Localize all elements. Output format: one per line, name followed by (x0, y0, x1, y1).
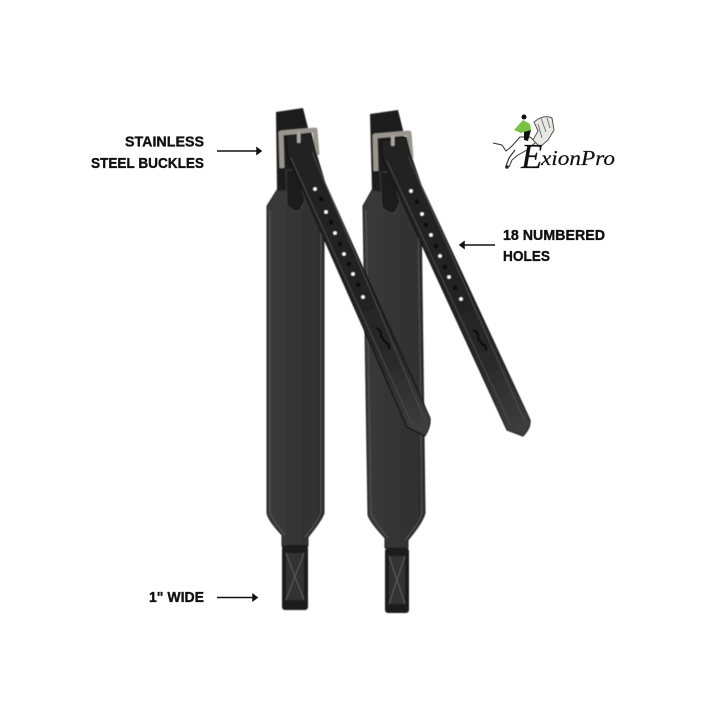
right loop (385, 548, 409, 613)
right strap (381, 137, 530, 436)
ExionPro logo (493, 114, 615, 176)
right strap logo stamp (473, 330, 486, 351)
left strap logo stamp (376, 328, 389, 349)
left main body (267, 180, 324, 546)
label: 1 inch wide: 1" WIDE (149, 590, 204, 606)
left keeper (286, 170, 305, 211)
label: stainless steel buckles: STEEL BUCKLES (91, 156, 204, 172)
label: stainless steel buckles: STAINLESS (125, 134, 204, 150)
right keeper (380, 172, 400, 213)
right main body (363, 182, 425, 548)
logo wordmark: E (520, 137, 542, 176)
label: 18 numbered holes: HOLES (503, 249, 550, 265)
left strap holes (313, 187, 365, 299)
arrow: to holes (460, 242, 495, 248)
right buckle (375, 133, 411, 171)
left loop (282, 545, 308, 610)
left buckle (281, 130, 317, 168)
label: 18 numbered holes: 18 NUMBERED (503, 228, 605, 244)
right stirrup leather (363, 110, 530, 613)
left back tab (276, 108, 312, 205)
logo wordmark: xionPro (540, 146, 615, 170)
left strap (286, 133, 430, 436)
icon: horse and rider (493, 114, 554, 169)
arrow: to loop (217, 594, 257, 600)
right strap holes (409, 189, 463, 301)
arrow: to buckles (217, 148, 261, 154)
left stirrup leather (267, 108, 430, 610)
right back tab (370, 110, 407, 208)
